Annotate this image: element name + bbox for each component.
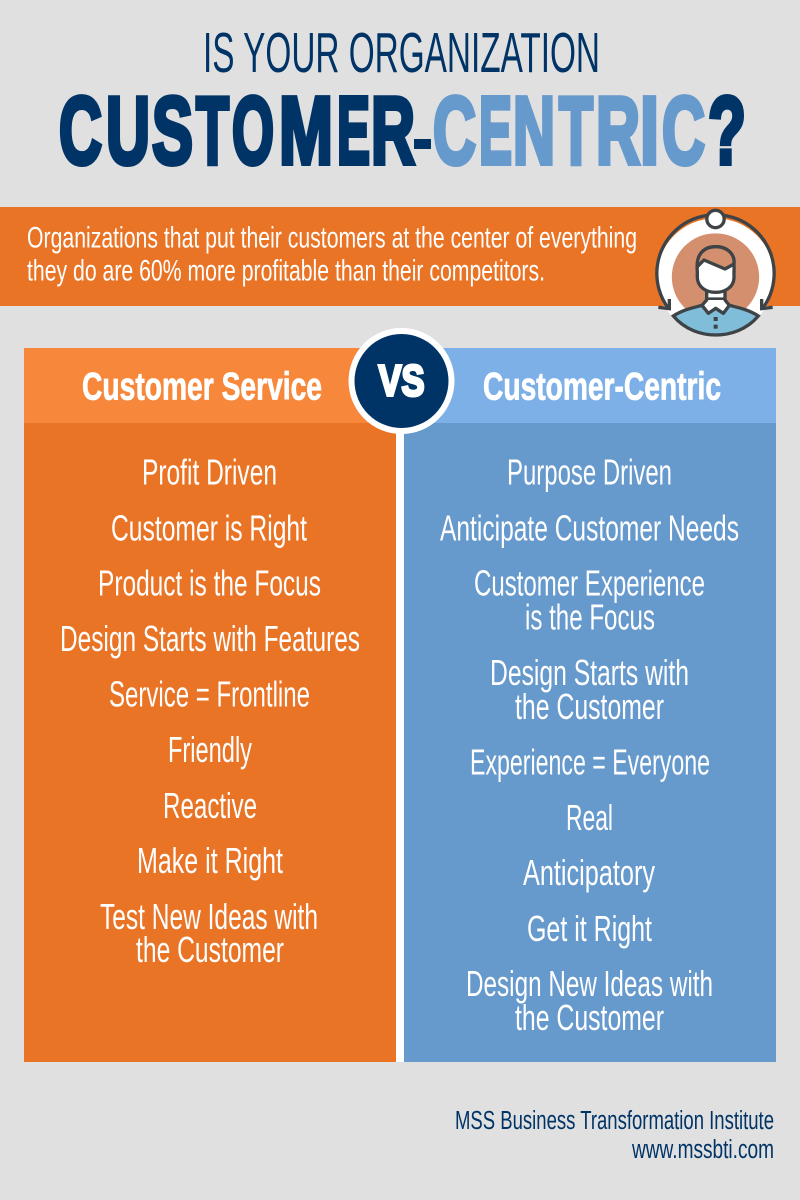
title	[59, 21, 746, 184]
heading: customer service: Customer Service	[82, 366, 322, 409]
footer credit	[455, 1107, 774, 1164]
title: T	[196, 78, 229, 184]
title: T	[559, 78, 593, 184]
list: customer service traits: Profit Driven	[142, 452, 277, 492]
list: customer service traits: Test New Ideas with	[100, 896, 318, 937]
title: R	[371, 78, 415, 184]
title: E	[337, 78, 370, 184]
list: customer-centric traits: Anticipatory	[523, 852, 655, 893]
title: E	[479, 78, 512, 184]
list: customer-centric traits: Real	[566, 797, 613, 838]
list: customer-centric traits: Get it Right	[527, 908, 652, 949]
list: customer-centric traits: the Customer	[515, 997, 664, 1038]
vs badge: VS	[378, 356, 424, 406]
list: customer-centric traits: Purpose Driven	[507, 452, 672, 492]
list: customer service traits: Customer is Right	[111, 508, 307, 548]
list: customer service traits: the Customer	[136, 929, 284, 970]
icon: customer in a circle	[657, 210, 774, 336]
intro banner: they do are 60% more profitable than their competitors.	[27, 255, 545, 288]
title: S	[152, 78, 193, 184]
list: customer service traits: Friendly	[168, 729, 252, 770]
title: C	[662, 78, 705, 184]
title: R	[596, 78, 640, 184]
title: C	[433, 78, 476, 184]
list: customer service traits	[60, 452, 360, 970]
title: I	[640, 78, 659, 184]
list: customer service traits: Design Starts with Features	[60, 618, 360, 659]
list: customer service traits: Reactive	[163, 785, 257, 826]
list: customer-centric traits	[440, 452, 739, 1038]
list: customer-centric traits: is the Focus	[525, 596, 655, 638]
title: M	[279, 78, 333, 184]
intro banner	[0, 207, 800, 306]
list: customer-centric traits: Design Starts with	[490, 652, 689, 693]
panel: customer-centric	[404, 348, 776, 1062]
title: O	[232, 78, 274, 184]
list: customer service traits: Service = Frontline	[109, 674, 310, 714]
list: customer service traits: Product is the Focus	[98, 562, 321, 604]
title: U	[106, 78, 150, 184]
list: customer service traits: Make it Right	[137, 840, 283, 881]
vs badge	[348, 328, 454, 434]
title: C	[59, 78, 102, 184]
panel: customer service	[24, 348, 396, 1062]
title: ?	[708, 78, 746, 184]
list: customer-centric traits: the Customer	[515, 686, 664, 727]
title: N	[513, 78, 555, 184]
